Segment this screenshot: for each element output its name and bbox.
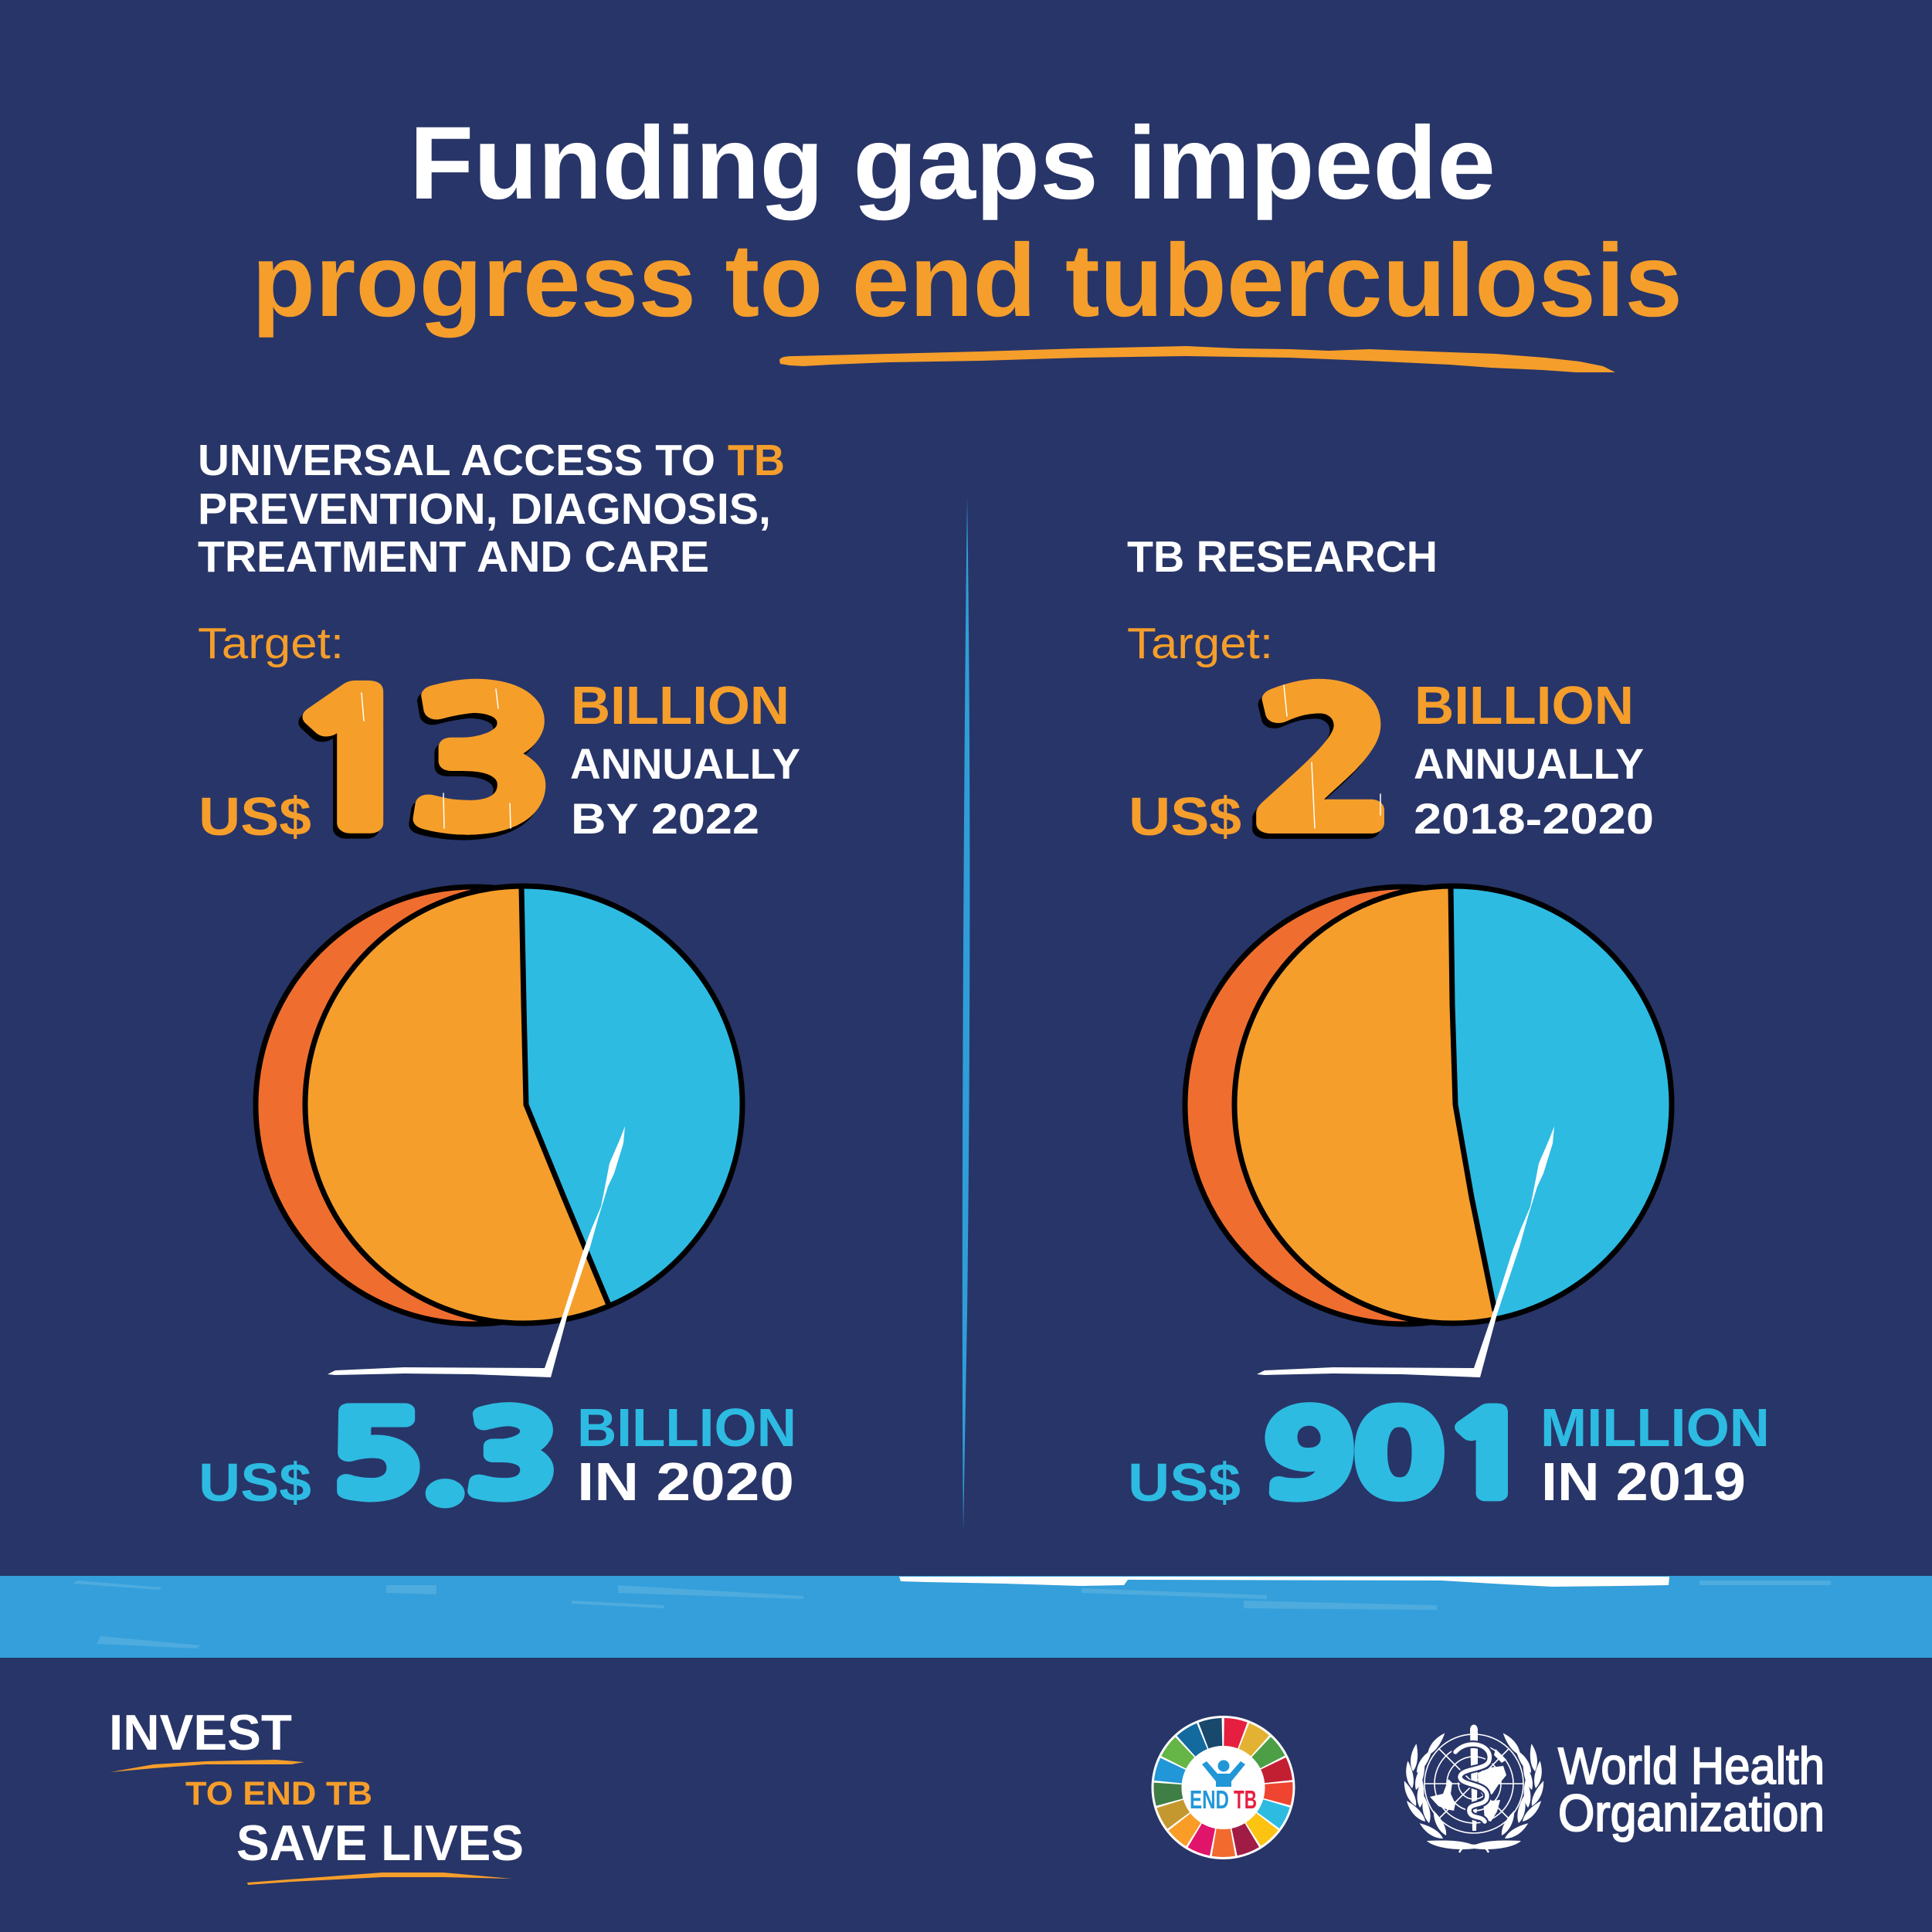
emblem serpent [1455,1744,1489,1822]
target figure: US$ 2 billion annually 2018-2020: US$ [1129,786,1241,847]
achieved figure: US$ 5.3 billion in 2020: IN 2020 [577,1452,794,1512]
target disc behind [256,887,693,1324]
funded share wedge [1451,886,1672,1319]
logo text: END: END [1190,1785,1229,1814]
target label: Target: [198,619,344,668]
funded disc [305,886,742,1323]
logo text: World Health Organization: World Health [1558,1737,1825,1795]
funded disc [1234,886,1672,1323]
target figure: US$ 2 billion annually 2018-2020: BILLION [1414,675,1634,735]
logo text: World Health Organization: Organization [1558,1784,1825,1842]
target figure: US$ 2 billion annually 2018-2020: 2 [1253,674,1395,852]
slogan: invest: INVEST [109,1704,292,1761]
title underline stroke [779,346,1615,372]
target figure: US$ 13 billion annually by 2022: US$ [199,786,311,847]
title line 1: Funding gaps impede [409,106,1496,221]
slogan: to end TB: TO END TB [185,1775,372,1812]
heading: TB research: TB RESEARCH [1127,532,1438,582]
emblem continents [1430,1749,1506,1822]
target figure: US$ 13 billion annually by 2022: 13 [282,674,537,853]
divider between panels [963,497,969,1530]
target figure: US$ 13 billion annually by 2022: ANNUALLY [570,739,800,788]
target figure: US$ 13 billion annually by 2022: BILLION [571,675,789,735]
emblem ribbon [1427,1841,1521,1852]
logo: End TB wheel [1151,1716,1295,1859]
heading: universal access: TREATMENT AND CARE [198,532,709,582]
logo: WHO emblem [1401,1724,1547,1852]
disc outline [305,886,742,1323]
target figure: US$ 2 billion annually 2018-2020: ANNUALLY [1414,739,1644,788]
target figure: US$ 2 billion annually 2018-2020: 2018-2020 [1414,794,1654,843]
disc outline [1234,886,1672,1323]
slogan [109,1704,524,1885]
logo text: TB: TB [1234,1785,1257,1814]
emblem staff [1470,1724,1478,1831]
scratch marks on number [362,689,511,828]
emblem globe [1424,1734,1523,1833]
scratch marks on number [1284,685,1380,828]
achieved figure: US$ 901 million in 2019: 901 [1265,1400,1533,1512]
achieved figure: US$ 5.3 billion in 2020: BILLION [577,1397,796,1458]
target figure: US$ 13 billion annually by 2022 [199,674,800,853]
heading: universal access [198,436,785,582]
icon: person with raised arms [1202,1760,1245,1787]
achieved figure: US$ 901 million in 2019: MILLION [1540,1397,1770,1458]
target disc behind [1185,887,1622,1324]
pie chart: US$ 5.3 billion of 13 billion [256,886,743,1377]
white brush streak [899,1577,1669,1587]
target label: Target: [1127,619,1273,668]
heading: universal access: TB [728,436,785,485]
title [252,106,1682,372]
achieved figure: US$ 5.3 billion in 2020 [199,1397,796,1513]
wedge divider [521,886,609,1305]
pie chart: US$ 901 million of 2 billion [1185,886,1672,1377]
underline: save lives [247,1873,512,1885]
leader line [1257,1126,1554,1377]
title line 2: progress to end tuberculosis [252,223,1682,338]
funded share wedge [521,886,743,1306]
heading: universal access: PREVENTION, DIAGNOSIS, [198,484,771,534]
achieved figure: US$ 901 million in 2019: US$ [1128,1452,1241,1513]
leader line [328,1126,625,1377]
underline: invest [110,1760,304,1772]
achieved figure: US$ 5.3 billion in 2020: 5.3 [331,1400,558,1512]
achieved figure: US$ 5.3 billion in 2020: US$ [199,1452,311,1513]
target figure: US$ 13 billion annually by 2022: BY 2022 [571,794,759,843]
brushed blue band [0,1576,1932,1658]
slogan: save lives: SAVE LIVES [236,1815,524,1871]
achieved figure: US$ 901 million in 2019: IN 2019 [1541,1452,1746,1512]
panel: universal access [198,436,800,1513]
wedge divider [1451,886,1495,1311]
target figure: US$ 2 billion annually 2018-2020 [1129,674,1654,852]
heading: universal access: UNIVERSAL ACCESS TO [198,436,715,485]
logo text: World Health Organization [1558,1737,1825,1842]
emblem wreath [1401,1730,1547,1841]
panel: TB research [1127,532,1770,1513]
achieved figure: US$ 901 million in 2019 [1128,1397,1770,1513]
